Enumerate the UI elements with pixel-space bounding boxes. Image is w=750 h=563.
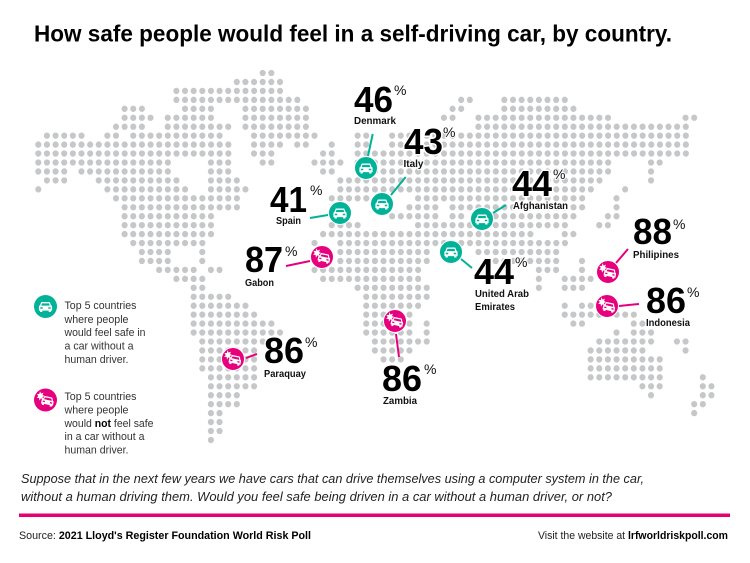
callout: Indonesia 86%: % bbox=[687, 284, 699, 300]
callout: United Arab Emirates 44% bbox=[440, 240, 529, 313]
icon: crash car, Paraquay bbox=[222, 348, 244, 370]
callout: Italy 43% bbox=[370, 121, 455, 216]
value: Philipines: 88 bbox=[633, 211, 672, 252]
callout: Indonesia 86% bbox=[596, 280, 699, 329]
icon: legend safe car bbox=[34, 295, 57, 318]
icon: safe car, Denmark bbox=[354, 156, 378, 180]
icon: crash car, Philipines bbox=[596, 260, 620, 284]
value: Paraquay: 86 bbox=[264, 330, 304, 371]
callout: Afghanistan 44% bbox=[470, 163, 568, 230]
icon: safe car, Italy bbox=[370, 192, 394, 216]
callout: Spain 41%: % bbox=[310, 182, 322, 198]
value: Gabon: 87 bbox=[245, 239, 283, 280]
legend text: safe: Top 5 countries bbox=[64, 300, 137, 312]
legend text: safe: human driver. bbox=[64, 354, 128, 366]
legend: safe bbox=[34, 295, 146, 366]
legend text: not safe: Top 5 countries bbox=[64, 391, 137, 403]
label: Gabon: Gabon bbox=[245, 278, 274, 289]
callout: Denmark 46%: % bbox=[394, 82, 406, 98]
label: Philipines: Philipines bbox=[633, 250, 679, 261]
legend text: safe: where people bbox=[64, 314, 128, 326]
label: UAE: United Arab bbox=[475, 289, 529, 300]
label: UAE bbox=[475, 289, 529, 313]
value: Indonesia: 86 bbox=[646, 280, 686, 321]
callout: Italy 43%: % bbox=[443, 124, 455, 140]
icon: crash car, Indonesia bbox=[596, 294, 618, 318]
callout: Philipines 88% bbox=[596, 211, 685, 284]
icon: crash car, Gabon bbox=[310, 246, 334, 268]
legend text: not safe bbox=[64, 391, 154, 456]
value: UAE: 44 bbox=[474, 251, 514, 292]
icon: safe car, Afghanistan bbox=[470, 208, 494, 230]
label: Afghanistan: Afghanistan bbox=[513, 201, 568, 212]
survey question: without a human driving them. Would you feel safe being driven in a car without a human driver, or not? bbox=[21, 490, 612, 504]
label: Zambia: Zambia bbox=[383, 396, 417, 407]
label: Paraquay: Paraquay bbox=[264, 369, 306, 380]
value: Spain: 41 bbox=[270, 179, 307, 220]
label: UAE: Emirates bbox=[475, 302, 515, 313]
callout: United Arab Emirates 44%: % bbox=[515, 254, 527, 270]
label: Indonesia: Indonesia bbox=[646, 318, 690, 329]
callout: Afghanistan 44%: % bbox=[553, 166, 565, 182]
source line: Source: 2021 Lloyd's Register Foundation World Risk Poll bbox=[19, 530, 311, 542]
callout: Zambia 86% bbox=[382, 310, 436, 407]
legend text: not safe: human driver. bbox=[64, 444, 128, 456]
survey question bbox=[21, 472, 644, 504]
legend text: not safe: would not feel safe bbox=[64, 418, 154, 430]
legend text: not safe: where people bbox=[64, 404, 128, 416]
value: Afghanistan: 44 bbox=[512, 163, 552, 204]
label: Spain: Spain bbox=[276, 216, 301, 227]
value: Italy: 43 bbox=[404, 121, 443, 162]
survey question: Suppose that in the next few years we have cars that can drive themselves using a computer system in the car, bbox=[21, 472, 644, 486]
dot-matrix world map bbox=[38, 73, 712, 440]
legend text: not safe: in a car without a bbox=[64, 431, 145, 443]
legend text: safe: would feel safe in bbox=[64, 327, 146, 339]
icon: safe car, UAE bbox=[440, 240, 462, 264]
label: Italy: Italy bbox=[404, 159, 424, 170]
legend text: safe: a car without a bbox=[64, 340, 134, 352]
icon: safe car, Spain bbox=[328, 202, 352, 224]
callout: Spain 41% bbox=[270, 179, 352, 227]
legend text: safe bbox=[64, 300, 146, 366]
website line: Visit the website at lrfworldriskpoll.com bbox=[538, 530, 728, 542]
callout: Paraquay 86% bbox=[222, 330, 317, 380]
title: How safe people would feel in a self-driving car, by country. bbox=[34, 20, 672, 46]
callout: Philipines 88%: % bbox=[673, 216, 685, 232]
icon: legend crash car bbox=[34, 388, 57, 412]
value: Zambia: 86 bbox=[382, 358, 422, 399]
pink divider bbox=[19, 514, 730, 517]
callout: Gabon 87%: % bbox=[285, 243, 297, 259]
icon: crash car, Zambia bbox=[384, 310, 406, 332]
callout: Denmark 46% bbox=[354, 79, 406, 180]
callout: Zambia 86%: % bbox=[424, 361, 436, 377]
callout: Gabon 87% bbox=[245, 239, 334, 289]
callout: Paraquay 86%: % bbox=[305, 334, 317, 350]
value: Denmark: 46 bbox=[354, 79, 393, 120]
label: Denmark: Denmark bbox=[354, 116, 396, 127]
legend: not safe bbox=[34, 388, 154, 456]
